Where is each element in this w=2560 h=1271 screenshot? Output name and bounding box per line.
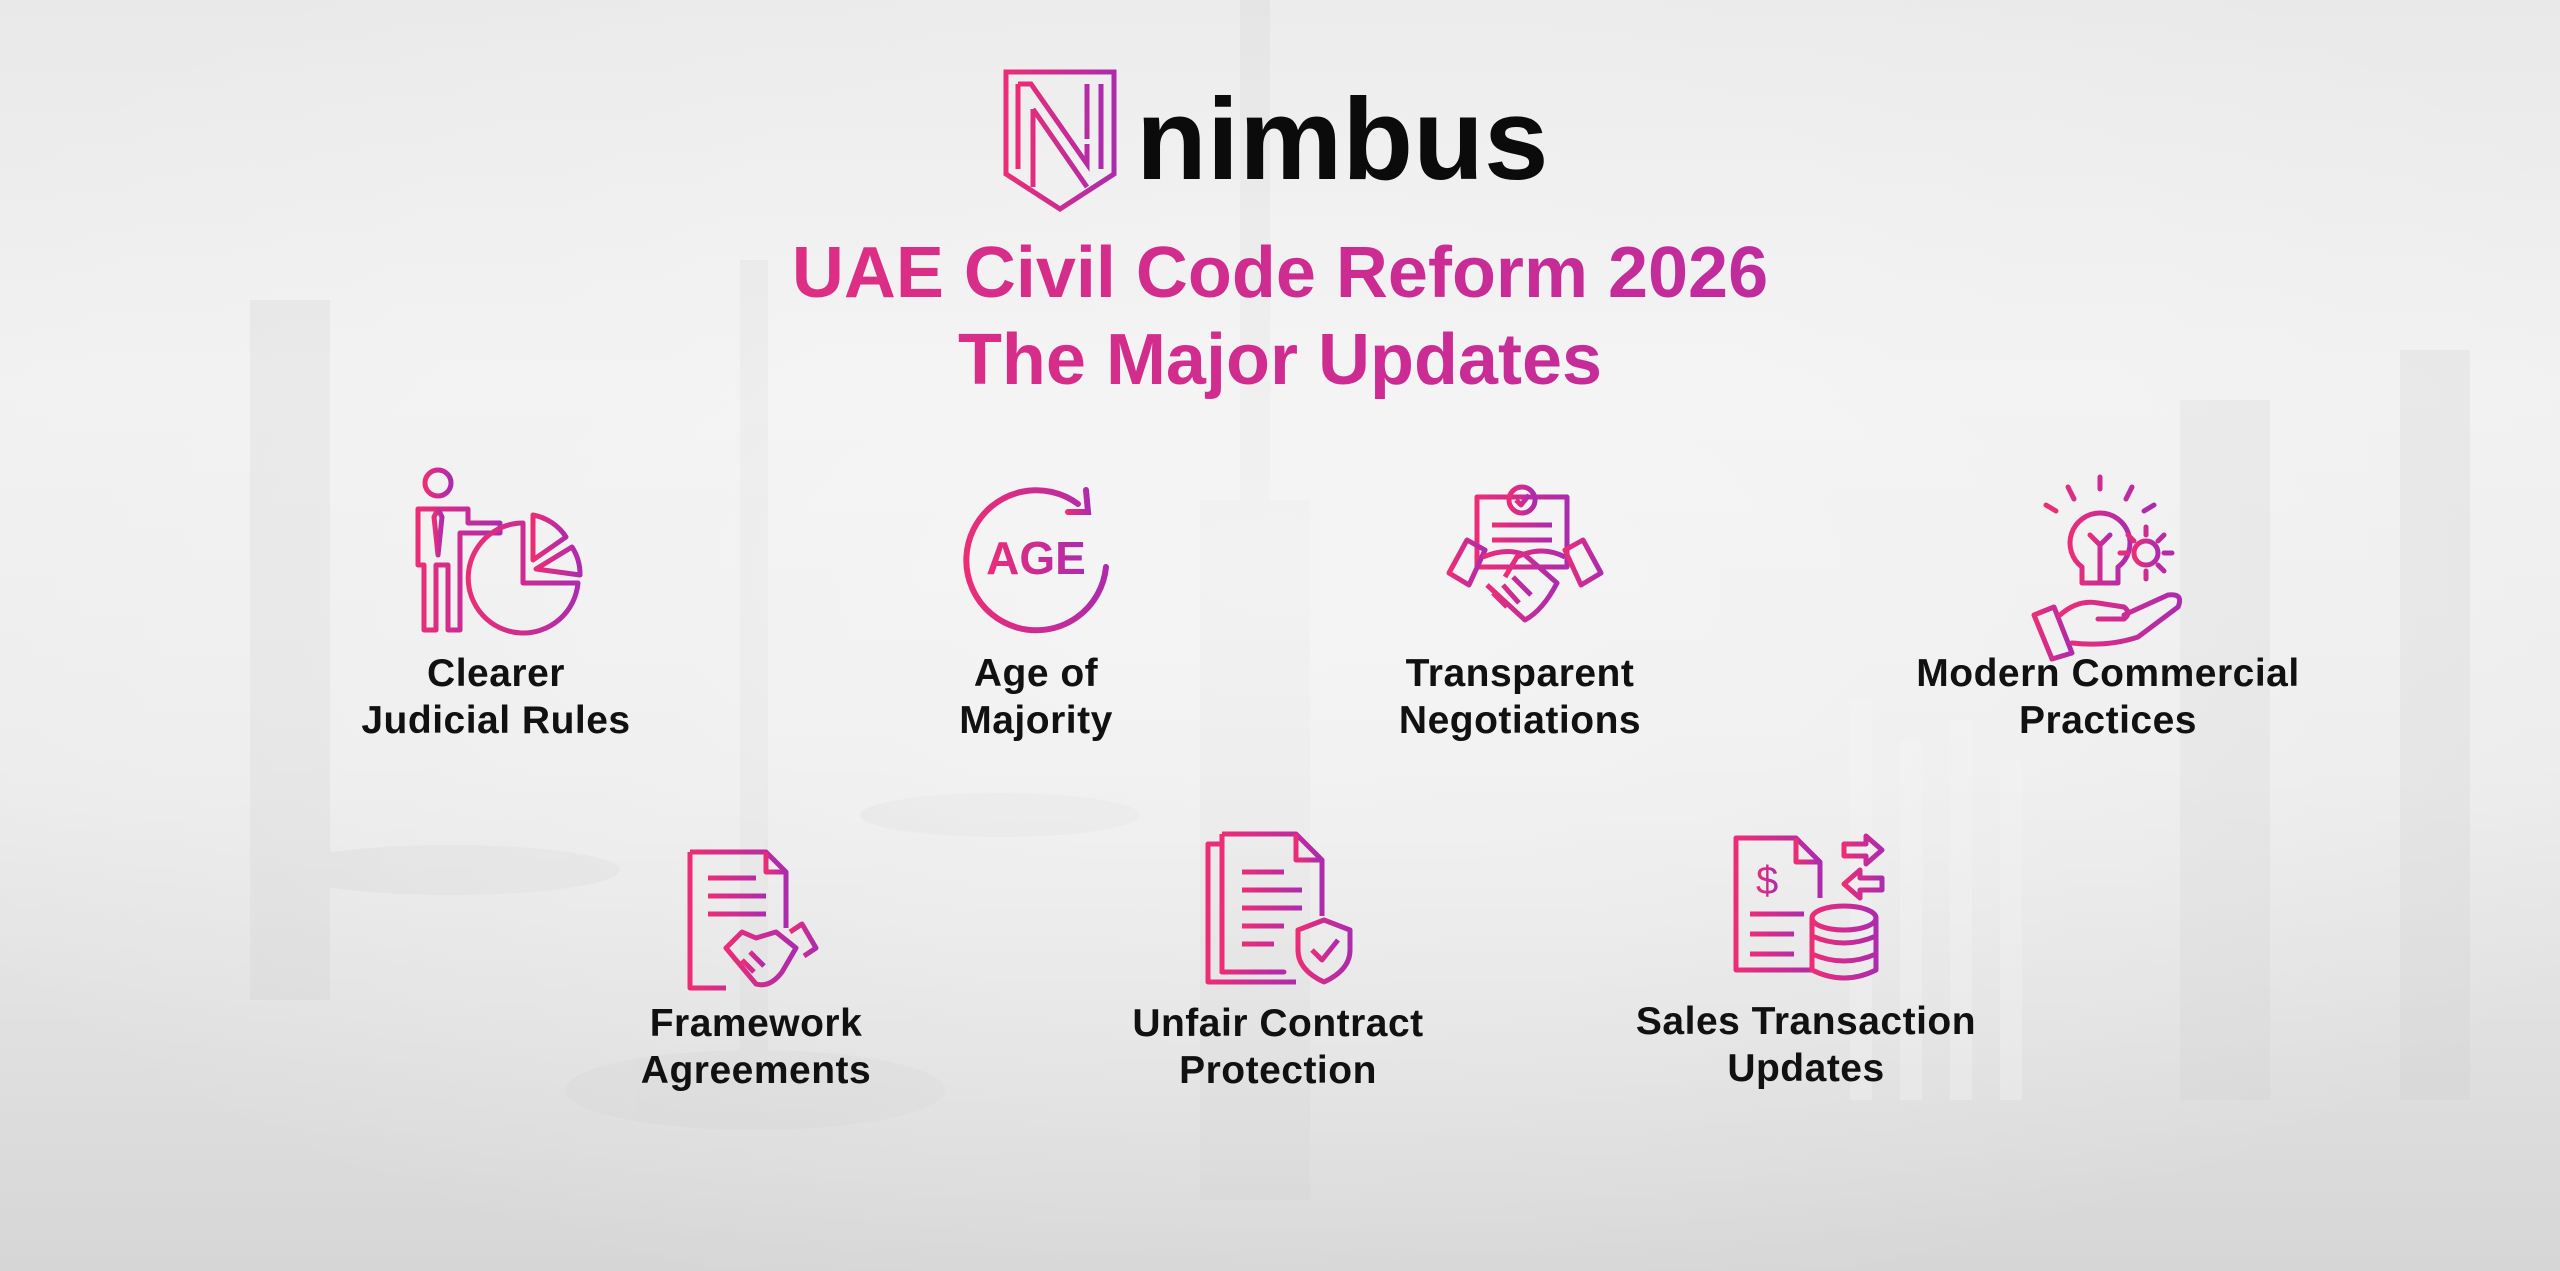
item: Age of Majority: Majority — [959, 699, 1113, 742]
icon: hand with lightbulb and gear — [2032, 474, 2182, 662]
icon: handshake with document — [1446, 484, 1604, 622]
item: Unfair Contract Protection — [1132, 832, 1424, 1092]
icon: document with handshake — [688, 850, 818, 990]
item: Framework Agreements — [641, 850, 871, 1092]
item: Clearer Judicial Rules — [361, 468, 631, 742]
item: Sales Transaction Updates: Updates — [1727, 1047, 1885, 1090]
item: Modern Commercial Practices: Practices — [2019, 699, 2197, 742]
item: Unfair Contract Protection: Unfair Contract — [1132, 1002, 1424, 1045]
item: Modern Commercial Practices — [1916, 474, 2300, 742]
item: Sales Transaction Updates: Sales Transaction — [1636, 1000, 1976, 1043]
item: Sales Transaction Updates — [1636, 834, 1976, 1090]
icon: AGE circle arrow — [963, 487, 1109, 634]
title: The Major Updates — [958, 320, 1602, 400]
item: Clearer Judicial Rules: Clearer — [427, 652, 565, 695]
title — [380, 230, 2180, 404]
item: Transparent Negotiations — [1399, 484, 1641, 742]
item: Transparent Negotiations: Transparent — [1406, 652, 1634, 695]
item: Transparent Negotiations: Negotiations — [1399, 699, 1641, 742]
icon: invoice with database and arrows — [1734, 834, 1884, 980]
title: UAE Civil Code Reform 2026 — [792, 233, 1768, 313]
logo text: nimbus — [1136, 74, 1548, 204]
logo — [1004, 70, 1548, 212]
item: Unfair Contract Protection: Protection — [1179, 1049, 1377, 1092]
icon: shield N logo — [1004, 70, 1116, 212]
item: Age of Majority: Age of — [974, 652, 1098, 695]
item: Age of Majority — [959, 487, 1113, 742]
icon: presenter with pie chart — [416, 468, 582, 636]
icon: documents with shield — [1206, 832, 1352, 984]
item: Framework Agreements: Agreements — [641, 1049, 871, 1092]
item: Framework Agreements: Framework — [650, 1002, 862, 1045]
item: Clearer Judicial Rules: Judicial Rules — [361, 699, 631, 742]
icon: AGE circle arrow: AGE — [986, 532, 1086, 584]
icon: invoice with database and arrows: $ — [1756, 859, 1778, 903]
item: Modern Commercial Practices: Modern Commercial — [1916, 652, 2300, 695]
